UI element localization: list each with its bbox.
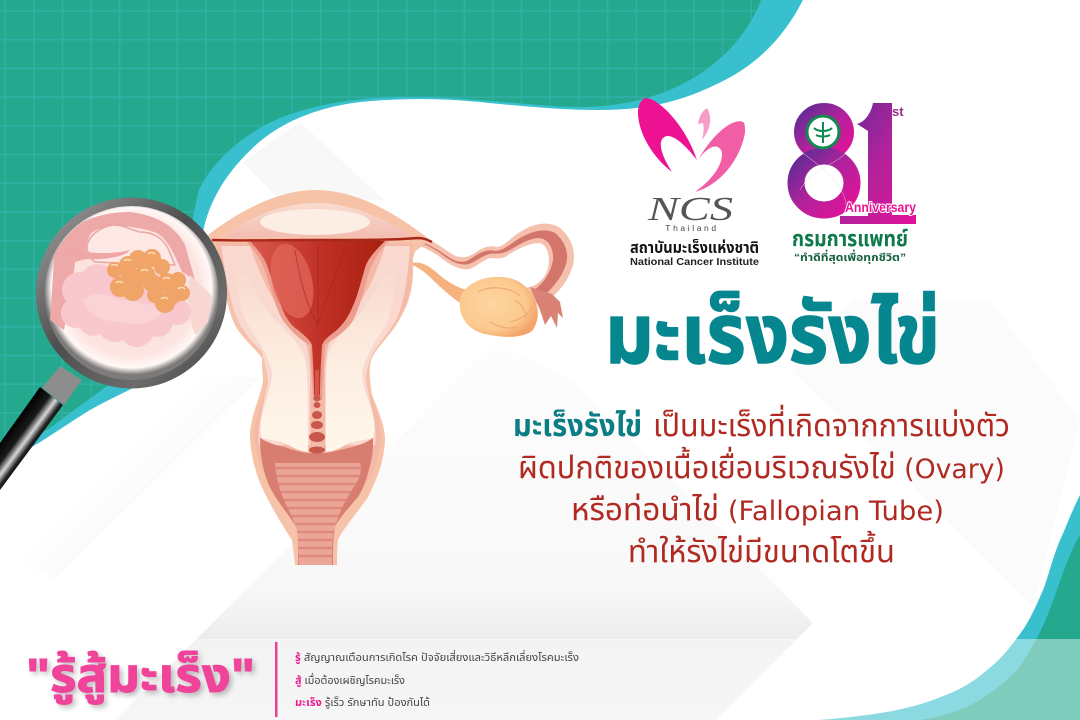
- logo: 81st Anniversary: [792, 103, 916, 264]
- tumour highlights: [111, 253, 185, 299]
- logo: National Cancer Institute: [630, 98, 759, 268]
- cloud highlight: [82, 294, 165, 324]
- dome highlight: [260, 209, 370, 235]
- vaginal folds: [275, 463, 361, 565]
- uterus outer body: [208, 190, 430, 565]
- background: top-left green wave with grid: [0, 0, 800, 460]
- left cream wall: [235, 264, 308, 452]
- st suffix: st: [892, 104, 904, 119]
- English institute name: National Cancer Institute: [630, 257, 759, 268]
- right cream wall: [326, 261, 396, 452]
- cervix canal: [315, 370, 319, 398]
- uterine cavity: [250, 241, 385, 395]
- ovarian ligament: [412, 262, 467, 303]
- lens content: zoomed ovary and tumour: [50, 212, 212, 347]
- cavity surround: [246, 241, 389, 400]
- background: bottom-right cyan wave: [817, 495, 1080, 720]
- background: top-left cyan wave: [0, 0, 803, 462]
- title: มะเร็งรังไข่: [605, 287, 940, 381]
- butterfly left wing: [638, 98, 697, 172]
- description text block: [513, 404, 1010, 569]
- lens: [44, 206, 218, 380]
- cervix beads: [309, 394, 325, 454]
- cavity fold lines: [295, 243, 345, 330]
- Thailand caption: Thailand: [665, 223, 719, 233]
- illustration: magnifying glass: [0, 198, 227, 490]
- department seal: [807, 116, 839, 148]
- magnifier rim: [36, 198, 227, 388]
- NCS script mark: NCS: [647, 191, 733, 228]
- cloud ovary: [61, 260, 191, 347]
- uterine wall: [216, 243, 413, 480]
- pale wall left: [221, 246, 310, 445]
- description line 2: ผิดปกติของเนื้อเยื่อบริเวณรังไข่ (Ovary): [518, 446, 1005, 485]
- Anniversary label: Anniversary: [845, 200, 916, 215]
- slogan: "รู้สู้มะเร็ง": [29, 653, 258, 708]
- illustration: uterus anatomy: [208, 190, 574, 568]
- background: bottom-right green wave: [920, 535, 1080, 720]
- butterfly right wing: [695, 121, 745, 192]
- slogan: "รู้สู้มะเร็ง": [26, 650, 255, 705]
- numeral 8 swirl lines: [800, 152, 847, 205]
- department motto: “ทำดีที่สุดเพื่อทุกชีวิต”: [794, 249, 906, 264]
- bottom translucent band: [0, 639, 1080, 720]
- tendon: [86, 250, 130, 260]
- explanation line 2: สู้ เมื่อต้องเผชิญโรคมะเร็ง: [295, 672, 405, 687]
- numeral 1: [840, 103, 916, 224]
- magnifier handle: [0, 366, 82, 490]
- cream window: [87, 225, 175, 265]
- explanation line 3: มะเร็ง รู้เร็ว รักษาทัน ป้องกันได้: [295, 696, 430, 709]
- explanation line 1: รู้ สัญญาณเตือนการเกิดโรค ปัจจัยเสี่ยงและวิธีหลีกเลี่ยงโรคมะเร็ง: [295, 649, 579, 664]
- uterus dome: [225, 203, 412, 237]
- numeral 8: [796, 110, 852, 210]
- slogan explanation: [295, 649, 579, 709]
- vaginal canal: [260, 438, 373, 565]
- tumour cluster: [107, 249, 190, 313]
- cavity highlight: [263, 239, 321, 323]
- description line 1 keyword: มะเร็งรังไข่: [513, 408, 642, 443]
- ovary: [460, 277, 538, 337]
- pale wall right: [325, 246, 410, 445]
- department name: กรมการแพทย์: [792, 226, 908, 251]
- Thai institute name: สถาบันมะเร็งแห่งชาติ: [630, 239, 759, 257]
- butterfly small feather: [698, 108, 710, 140]
- top dark wall line: [212, 238, 432, 242]
- pink fold: [50, 212, 195, 330]
- translucent right tissue: [188, 275, 212, 335]
- fallopian tube: [410, 224, 574, 328]
- slogan divider: [275, 642, 278, 717]
- description line 4: ทำให้รังไข่มีขนาดโตขึ้น: [628, 530, 895, 569]
- description line 3: หรือท่อนำไข่ (Fallopian Tube): [571, 492, 944, 527]
- description line 1: เป็นมะเร็งที่เกิดจากการแบ่งตัว: [653, 404, 1010, 443]
